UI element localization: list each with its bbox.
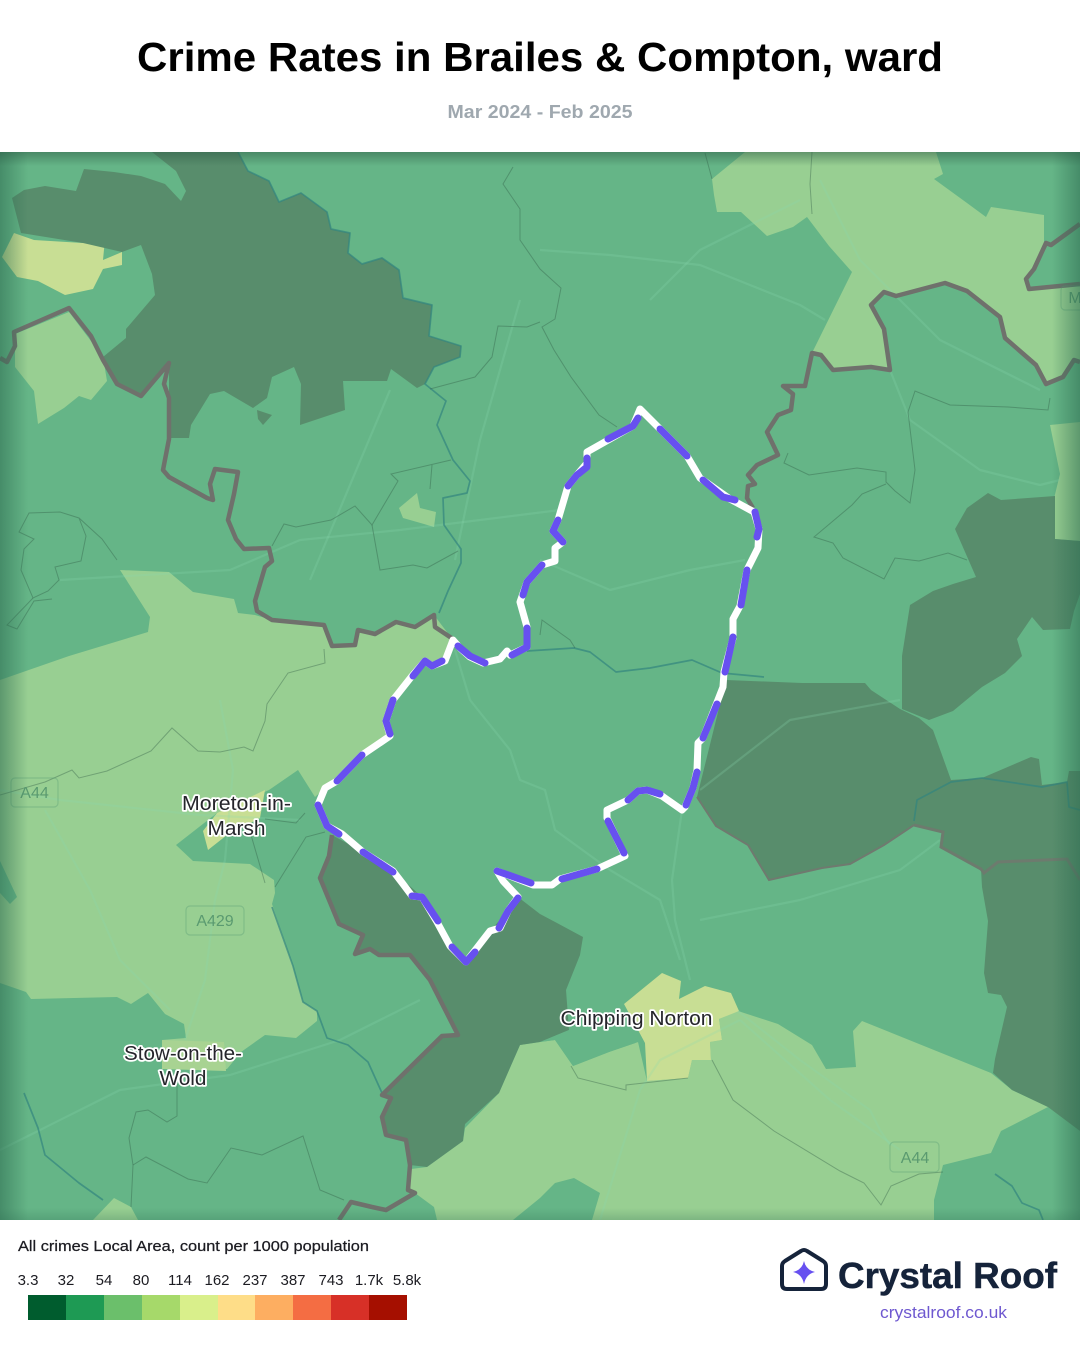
- legend colour bar: [28, 1295, 407, 1320]
- road shields: A44: [901, 1150, 929, 1167]
- light green areas: [0, 152, 1080, 1220]
- logo wordmark: Crystal Roof: [838, 1255, 1058, 1296]
- icon: house with star: [782, 1250, 826, 1289]
- place label: Stow-on-the-Wold: Wold: [160, 1068, 206, 1090]
- Stow small patch: [162, 1040, 226, 1071]
- legend scale values: 162: [204, 1272, 230, 1289]
- yellow-green high-rate areas: [2, 233, 739, 1081]
- road shields: A44: [20, 785, 49, 802]
- place label: Moreton-in-Marsh: Marsh: [208, 818, 266, 840]
- legend scale values: 743: [318, 1272, 344, 1289]
- place label: Stow-on-the-Wold: [124, 1043, 242, 1090]
- rivers: [24, 152, 1080, 1220]
- place label: Moreton-in-Marsh: Moreton-in-: [182, 793, 291, 815]
- legend scale values: 80: [133, 1272, 149, 1289]
- logo: Crystal Roof: [782, 1250, 1058, 1322]
- place label: Chipping Norton: Chipping Norton: [560, 1008, 712, 1030]
- legend scale values: 3.3: [18, 1272, 38, 1289]
- legend scale values: 5.8k: [393, 1272, 422, 1289]
- ward outline: Brailes & Compton: [318, 409, 759, 962]
- legend scale values: 1.7k: [355, 1272, 384, 1289]
- place label: Stow-on-the-Wold: Stow-on-the-: [124, 1043, 242, 1065]
- road network: [23, 223, 1058, 1144]
- road shields: A429: [196, 913, 234, 930]
- legend title: All crimes Local Area, count per 1000 population: [18, 1238, 369, 1255]
- title: Crime Rates in Brailes & Compton, ward: [137, 34, 943, 80]
- subtitle: date range: Mar 2024 - Feb 2025: [448, 101, 632, 122]
- place label: Moreton-in-Marsh: [182, 793, 291, 840]
- thin area boundaries: [0, 152, 1050, 1207]
- legend scale values: [18, 1272, 422, 1289]
- local authority boundary: [0, 224, 1080, 1220]
- legend scale values: 114: [168, 1272, 192, 1289]
- legend scale values: 54: [96, 1272, 112, 1289]
- legend: [18, 1238, 422, 1320]
- logo url: crystalroof.co.uk: [880, 1304, 1008, 1322]
- base-green pockets: [0, 861, 638, 1066]
- legend scale values: 387: [280, 1272, 306, 1289]
- legend scale values: 32: [58, 1272, 74, 1289]
- road shields: [11, 286, 1080, 1172]
- map edge shading: [0, 152, 1080, 1220]
- map panel: [0, 152, 1080, 1220]
- legend scale values: 237: [242, 1272, 268, 1289]
- dark low-rate areas: [12, 152, 1080, 1167]
